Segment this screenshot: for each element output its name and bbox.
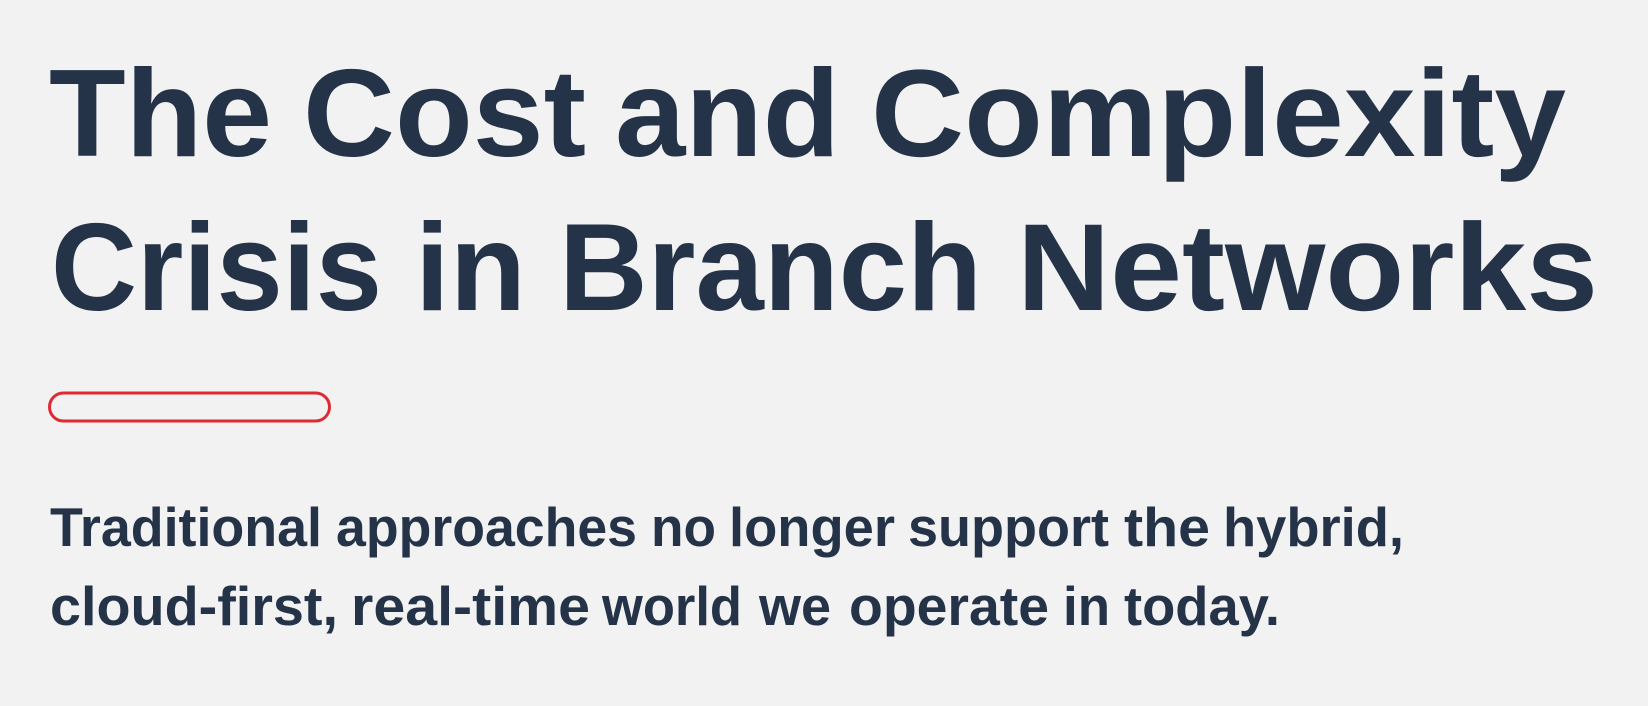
subtitle: today. — [1124, 575, 1280, 637]
subtitle: world — [601, 575, 742, 637]
subtitle: hybrid, — [1223, 496, 1404, 558]
title: in — [415, 199, 526, 337]
red accent pill — [50, 393, 330, 421]
title: Cost — [303, 45, 586, 183]
subtitle: we — [758, 575, 831, 637]
subtitle: cloud-first, — [50, 575, 338, 637]
title: and — [615, 45, 840, 183]
subtitle: longer — [729, 496, 895, 558]
subtitle: support — [908, 496, 1109, 558]
subtitle: no — [651, 496, 716, 558]
subtitle — [50, 496, 1404, 637]
title: Crisis — [51, 199, 382, 337]
subtitle: in — [1063, 575, 1110, 637]
title — [49, 45, 1598, 337]
title: Complexity — [871, 45, 1566, 183]
subtitle: Traditional — [50, 496, 322, 558]
subtitle: approaches — [336, 496, 637, 558]
title: Branch — [559, 199, 982, 337]
subtitle: operate — [849, 575, 1049, 637]
title: The — [49, 45, 272, 183]
title: Networks — [1017, 199, 1598, 337]
subtitle: the — [1124, 496, 1210, 558]
subtitle: real-time — [351, 575, 590, 637]
